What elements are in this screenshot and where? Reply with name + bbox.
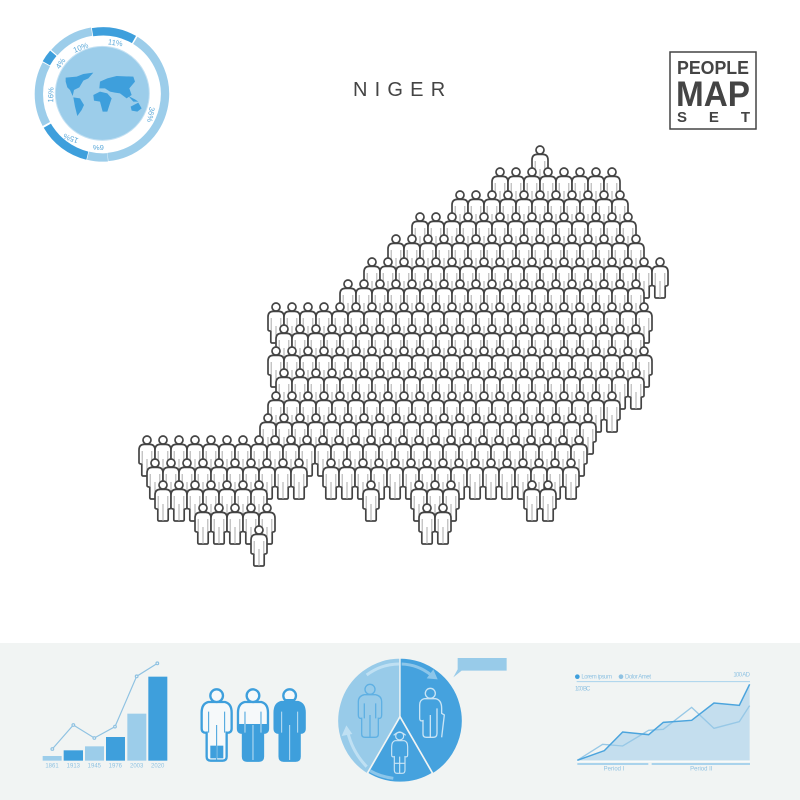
- donut segments: [39, 31, 165, 157]
- baseline: [577, 760, 750, 763]
- row 13: [260, 414, 596, 454]
- trend line: [51, 662, 159, 750]
- figure: child: [392, 732, 408, 773]
- percent labels: 36%: [145, 106, 157, 123]
- year labels: 1976: [109, 763, 123, 769]
- globe disc: [55, 46, 149, 140]
- row 9: [276, 325, 644, 365]
- row 7: [340, 280, 644, 320]
- pie: right slice: [400, 658, 462, 774]
- row 10: [268, 347, 652, 387]
- percent labels: 15%: [62, 131, 80, 145]
- year labels: 1945: [88, 763, 102, 769]
- row 2: [492, 168, 620, 208]
- percent labels: [46, 37, 157, 152]
- period bars: [577, 763, 750, 765]
- percent labels: 6%: [93, 143, 104, 152]
- arrow: top: [367, 664, 438, 679]
- bars: [43, 677, 167, 761]
- legend: Lorem ipsum: [581, 675, 612, 681]
- percent labels: 10%: [72, 41, 90, 55]
- figure: half fill: [238, 689, 268, 761]
- period labels: Period II: [690, 766, 713, 772]
- top axis: [577, 680, 750, 683]
- area line chart: [575, 672, 751, 772]
- legend: 100 BC: [575, 686, 591, 692]
- row 18: [251, 526, 267, 566]
- pie: bottom slice: [367, 717, 433, 783]
- year labels: 1861: [45, 763, 59, 769]
- series: light: [577, 706, 750, 760]
- row 8: [268, 303, 652, 343]
- year labels: 2003: [130, 763, 144, 769]
- three body figures: [202, 689, 305, 761]
- bar and line chart: [43, 662, 167, 769]
- badge: people map set: PEOPLE: [677, 58, 749, 78]
- legend: Dolor Amet: [625, 675, 651, 681]
- period labels: [604, 766, 713, 772]
- percent labels: 4%: [54, 56, 68, 71]
- year labels: 1913: [67, 763, 81, 769]
- percent labels: 16%: [46, 87, 56, 103]
- globe donut chart: [39, 31, 165, 157]
- period labels: Period I: [604, 766, 625, 772]
- title: NIGER: [353, 79, 452, 101]
- row 17: [195, 504, 451, 544]
- people map of Niger: [139, 146, 668, 566]
- callout: [453, 658, 507, 677]
- pie: left slice: [338, 658, 400, 774]
- series: dark: [577, 684, 750, 760]
- legend: 100 AD: [733, 672, 751, 678]
- area: [577, 684, 750, 760]
- row 16: [155, 481, 556, 521]
- percent labels: 11%: [107, 37, 123, 48]
- row 5: [388, 235, 644, 275]
- bottom panel: [0, 643, 800, 800]
- row 11: [276, 369, 644, 409]
- row 4: [412, 213, 636, 253]
- row 1: [532, 146, 548, 186]
- legend: [575, 672, 751, 692]
- row 6: [364, 258, 668, 298]
- badge: people map set: [670, 52, 756, 129]
- row 14: [139, 436, 587, 476]
- badge: people map set: SET: [677, 109, 750, 126]
- figure: adult: [358, 684, 382, 737]
- row 12: [268, 392, 620, 432]
- age pie chart: [338, 658, 507, 783]
- year labels: [45, 763, 165, 769]
- figure: low fill: [202, 689, 232, 761]
- figure: full fill: [275, 689, 305, 761]
- year labels: 2020: [151, 763, 165, 769]
- badge: people map set: MAP: [676, 75, 750, 114]
- arrow: lower left: [342, 725, 393, 778]
- figure: elder with cane: [420, 688, 444, 737]
- row 3: [452, 191, 628, 231]
- row 15: [147, 459, 579, 499]
- world map: [66, 73, 142, 116]
